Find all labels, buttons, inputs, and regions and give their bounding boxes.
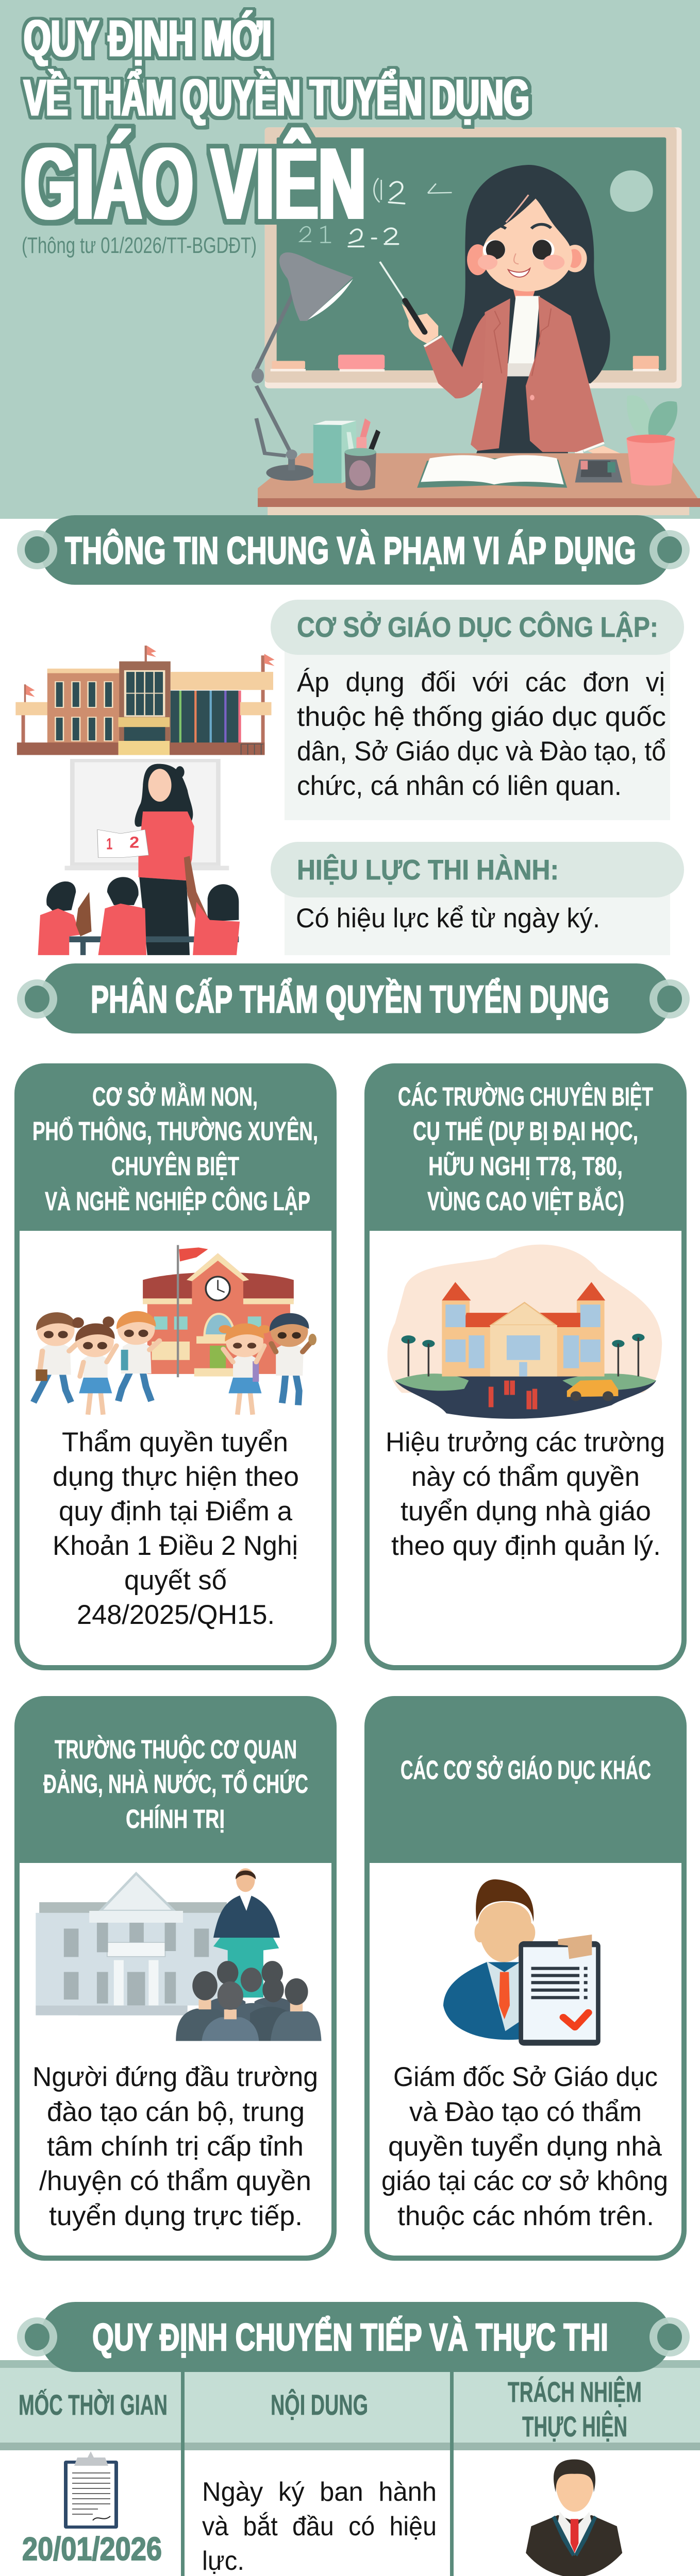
- card: preschool and general schools: CƠ SỞ MẦM NON,: [92, 1081, 258, 1111]
- illustration: man holding checklist: [443, 1879, 601, 2046]
- content: row 1: lực.: [202, 2546, 244, 2576]
- card: specialised schools: này có thẩm quyền: [411, 1462, 640, 1492]
- table header: NỘI DUNG: [271, 2388, 368, 2421]
- card: other educational institutions: Giám đốc Sở Giáo dục: [393, 2062, 658, 2092]
- illustration: speaker at podium with audience: [36, 1868, 322, 2041]
- illustration: teacher with pupils: 2: [129, 834, 139, 852]
- card: preschool and general schools: Thẩm quyền tuyển: [62, 1427, 288, 1458]
- panel: public education institutions: thuộc hệ thống giáo dục quốc: [297, 702, 666, 732]
- calculator: [575, 460, 623, 483]
- hero background: [0, 0, 700, 519]
- panel: public education institutions: chức, cá nhân có liên quan.: [297, 771, 622, 801]
- teacher figure: [380, 165, 626, 461]
- icon: official in suit: [526, 2460, 622, 2576]
- panel: effective date: HIỆU LỰC THI HÀNH:: [297, 854, 559, 886]
- illustration: specialised school campus: [388, 1245, 662, 1419]
- card: preschool and general schools: quy định tại Điểm a: [59, 1496, 293, 1527]
- card: preschool and general schools: PHỔ THÔNG, THƯỜNG XUYÊN,: [32, 1116, 318, 1146]
- title: GIÁO VIÊN: [24, 127, 366, 240]
- icon: signed clipboard: [64, 2451, 118, 2529]
- panel: effective date: [271, 842, 684, 955]
- illustration: pupils in front of school: [34, 1245, 316, 1415]
- content: row 1: và bắt đầu có hiệu: [202, 2512, 437, 2541]
- chalkboard: [265, 127, 681, 388]
- card: party and state schools: ĐẢNG, NHÀ NƯỚC, TỔ CHỨC: [43, 1769, 308, 1799]
- table: transition regulations: [0, 2360, 700, 2576]
- title: QUY ĐỊNH MỚI: [24, 10, 272, 67]
- card: specialised schools: HỮU NGHỊ T78, T80,: [428, 1151, 623, 1181]
- illustration: school building: [15, 646, 275, 755]
- card: party and state schools: tuyển dụng trực tiếp.: [49, 2201, 303, 2231]
- books and pen cup: [313, 418, 380, 490]
- table header: THỰC HIỆN: [522, 2410, 627, 2443]
- content: row 1: Ngày ký ban hành: [202, 2477, 437, 2507]
- card: specialised schools: VÙNG CAO VIỆT BẮC): [427, 1186, 624, 1216]
- card: preschool and general schools: CHUYÊN BIỆT: [111, 1151, 239, 1181]
- card: party and state schools: Người đứng đầu trường: [32, 2062, 318, 2092]
- card: other educational institutions: quyền tuyển dụng nhà: [388, 2131, 662, 2162]
- card: specialised schools: [364, 1063, 687, 1670]
- panel: public education institutions: dân, Sở Giáo dục và Đào tạo, tổ: [297, 736, 666, 767]
- desk: [258, 453, 700, 515]
- panel: effective date: Có hiệu lực kể từ ngày ký.: [296, 903, 600, 934]
- illustration: teacher with pupils: 1: [106, 835, 112, 853]
- card: preschool and general schools: dụng thực hiện theo: [53, 1462, 299, 1492]
- card: party and state schools: TRƯỜNG THUỘC CƠ QUAN: [55, 1734, 297, 1764]
- illustration: teacher at chalkboard with desk: [252, 127, 700, 515]
- card: party and state schools: đào tạo cán bộ, trung: [47, 2097, 305, 2127]
- card: other educational institutions: [364, 1696, 687, 2261]
- potted plant: [626, 395, 677, 486]
- card: party and state schools: CHÍNH TRỊ: [126, 1804, 225, 1834]
- section heading: general information: [17, 515, 690, 585]
- panel: public education institutions: Áp dụng đối với các đơn vị: [297, 667, 665, 698]
- card: other educational institutions: thuộc các nhóm trên.: [397, 2201, 654, 2231]
- panel: public education institutions: CƠ SỞ GIÁO DỤC CÔNG LẬP:: [297, 611, 658, 643]
- card: preschool and general schools: quyết số: [124, 1565, 227, 1596]
- table header: MỐC THỜI GIAN: [19, 2388, 168, 2421]
- section heading: recruitment authority: [17, 963, 690, 1033]
- card: party and state schools: tâm chính trị cấp tỉnh: [47, 2131, 304, 2162]
- panel: public education institutions: [271, 600, 684, 820]
- content: row 1: [202, 2477, 437, 2576]
- card: preschool and general schools: [14, 1063, 337, 1670]
- table header: [19, 2376, 642, 2443]
- section heading: transition and implementation: [17, 2302, 690, 2372]
- card: other educational institutions: và Đào tạo có thẩm: [409, 2097, 642, 2127]
- card: specialised schools: Hiệu trưởng các trường: [386, 1427, 665, 1458]
- open book: [417, 455, 567, 488]
- illustration: teacher with pupils: [38, 760, 240, 955]
- card: specialised schools: theo quy định quản lý.: [391, 1531, 661, 1561]
- card: preschool and general schools: VÀ NGHỀ NGHIỆP CÔNG LẬP: [45, 1186, 310, 1216]
- card: other educational institutions: giáo tại các cơ sở không: [381, 2166, 668, 2196]
- card: preschool and general schools: 248/2025/QH15.: [77, 1600, 275, 1630]
- card: preschool and general schools: Khoản 1 Điều 2 Nghị: [53, 1531, 298, 1561]
- date: signing date: 20/01/2026: [22, 2531, 162, 2567]
- card: party and state schools: /huyện có thẩm quyền: [39, 2166, 311, 2196]
- card: party and state schools: [14, 1696, 337, 2261]
- chalk numbers: [348, 182, 405, 246]
- subtitle: (Thông tư 01/2026/TT-BGDĐT): [22, 233, 257, 258]
- desk lamp: [252, 252, 353, 481]
- title: [24, 10, 529, 240]
- card: specialised schools: tuyển dụng nhà giáo: [401, 1496, 651, 1527]
